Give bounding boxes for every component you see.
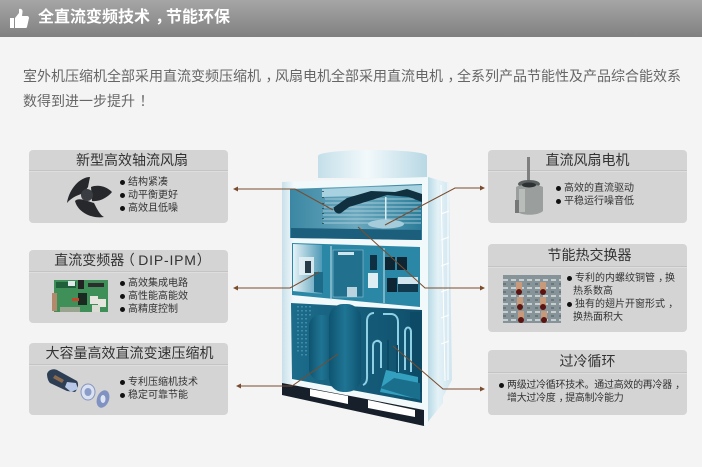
- bullet list: 平稳运行噪音低: [564, 196, 634, 207]
- heading: 直流变频器（DIP-IPM）: [54, 252, 211, 268]
- heading: 节能热交换器: [548, 247, 632, 263]
- bullet list: 高效的直流驱动: [564, 183, 634, 194]
- panel: compressor: [29, 343, 228, 415]
- heading: 新型高效轴流风扇: [76, 152, 188, 168]
- panel: axial fan: [29, 150, 228, 223]
- panel: fan motor: [488, 150, 687, 223]
- lower compartment: [291, 303, 422, 403]
- arrow: heat exchanger: [358, 227, 485, 290]
- bullet list: [120, 376, 198, 401]
- heading: [488, 350, 687, 373]
- arrow: subcooling: [393, 346, 485, 392]
- bullet list: 结构紧凑: [128, 177, 168, 188]
- heading: [29, 150, 228, 171]
- heading: 直流风扇电机: [546, 152, 630, 168]
- panel: heat exchanger: [488, 244, 687, 332]
- arrow: compressor: [236, 354, 338, 388]
- bullet list: 换热面积大: [573, 312, 623, 323]
- icon: thumbs up: [10, 8, 29, 28]
- icon: fan blades: [67, 177, 112, 218]
- bullet list: 动平衡更好: [128, 190, 178, 201]
- bullet list: [499, 379, 685, 404]
- bullet list: [567, 272, 678, 323]
- bullet list: [120, 176, 178, 214]
- bullet list: 两级过冷循环技术。通过高效的再冷器 ，: [507, 380, 685, 391]
- title: 全直流变频技术 ，节能环保: [38, 9, 230, 26]
- electrical box: [292, 243, 420, 307]
- base frame: [282, 383, 424, 426]
- fan guard: [318, 150, 427, 178]
- arrow: fan: [233, 186, 333, 210]
- bullet list: 增大过冷度 ，提高制冷能力: [507, 393, 623, 404]
- icon: compressor parts: [47, 369, 110, 408]
- bullet list: 高精度控制: [128, 304, 178, 315]
- intro text: 室外机压缩机全部采用直流变频压缩机 ，风扇电机全部采用直流电机 ，全系列产品节能性及产品综合能效系: [23, 68, 681, 84]
- heading: 大容量高效直流变速压缩机: [46, 345, 214, 361]
- panel: inverter: [29, 250, 228, 323]
- arrow: fan motor: [385, 186, 485, 225]
- cabinet side: [424, 177, 452, 426]
- bullet list: [556, 182, 634, 207]
- heading: [488, 150, 687, 171]
- bullet list: 稳定可靠节能: [128, 390, 188, 401]
- icon: circuit board: [52, 280, 108, 312]
- heading: 过冷循环: [560, 353, 616, 369]
- bullet list: 高效且低噪: [128, 203, 178, 214]
- bullet list: 独有的翅片开窗形式 ，: [575, 299, 678, 310]
- header bar: [0, 0, 702, 37]
- bullet list: 高效集成电路: [128, 278, 188, 289]
- heading: [29, 343, 228, 365]
- icon: copper tubes and fins: [503, 275, 561, 323]
- cabinet front: [282, 177, 428, 426]
- side grille: [441, 183, 449, 381]
- bullet list: 专利的内螺纹铜管 ，换: [575, 273, 675, 284]
- bullet list: [120, 277, 188, 315]
- icon: motor: [515, 157, 543, 215]
- bullet list: 热系数高: [573, 286, 613, 297]
- arrow: inverter: [233, 272, 319, 290]
- heading: [488, 244, 687, 267]
- panel: subcooling cycle: [488, 350, 687, 415]
- heading: [29, 250, 228, 272]
- bullet list: 高性能高能效: [128, 291, 188, 302]
- upper compartment: [290, 184, 422, 240]
- bullet list: 专利压缩机技术: [128, 377, 198, 388]
- intro text: 数得到进一步提升 ！: [23, 93, 153, 109]
- intro text: [23, 68, 681, 109]
